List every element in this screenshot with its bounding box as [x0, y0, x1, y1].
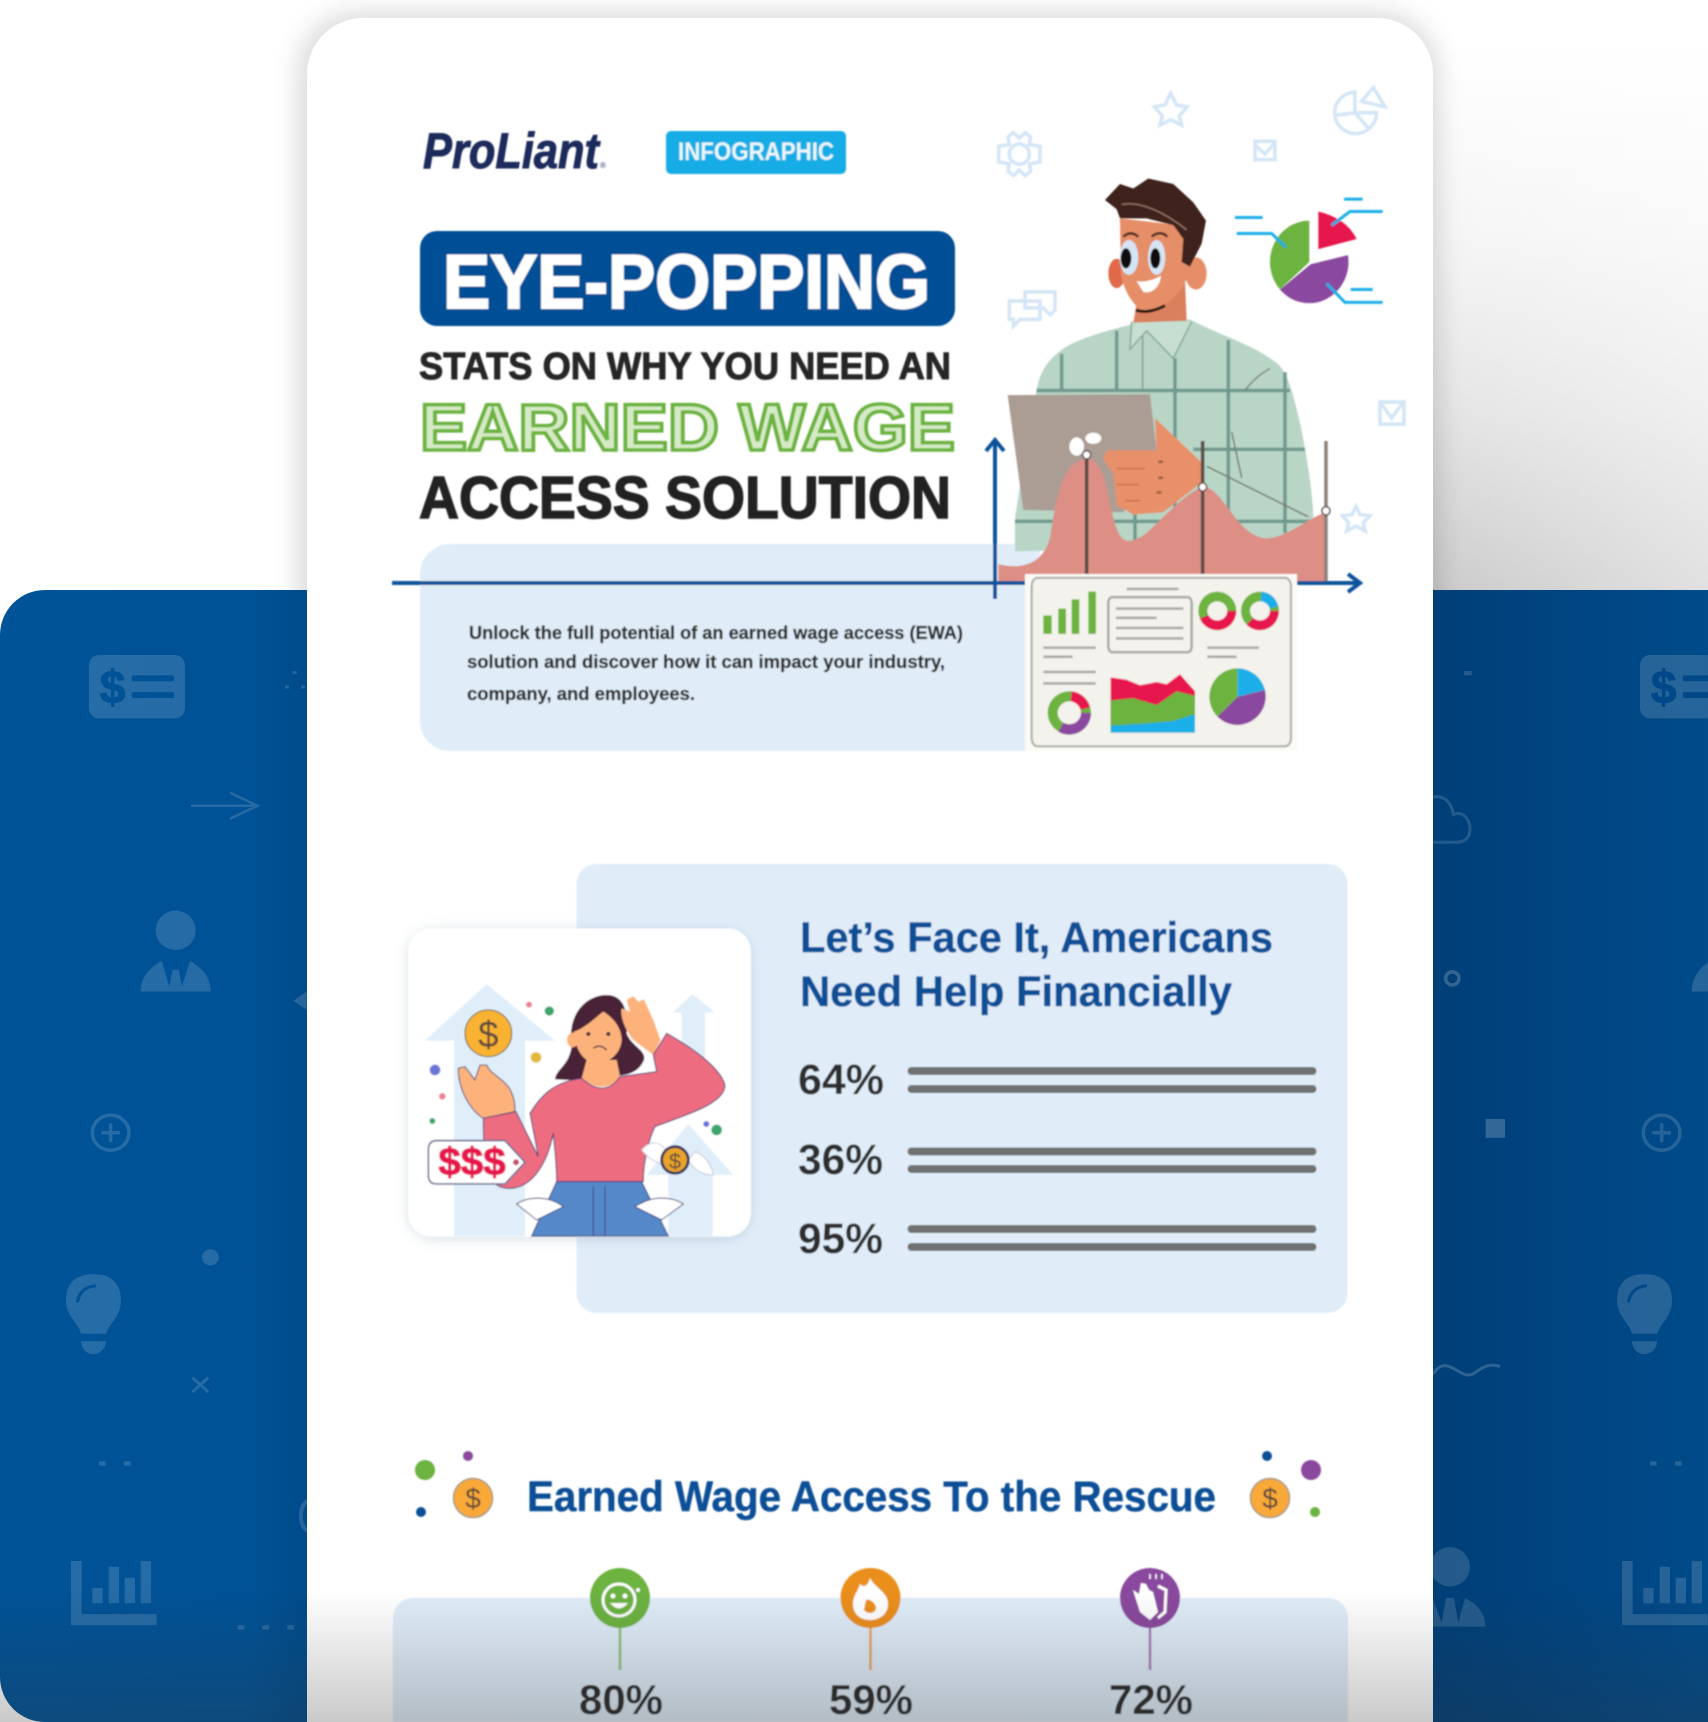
background icons: beside card on right: [1430, 671, 1505, 1627]
icon: checkbox: [1380, 402, 1404, 424]
area chart: [998, 459, 1326, 581]
panel: rescue stats: [393, 1598, 1348, 1722]
woman: [458, 995, 725, 1236]
heading: financial help: Let’s Face It, Americans: [800, 914, 1273, 962]
dashboard text lines: [1043, 589, 1259, 683]
icon: star small: [1343, 506, 1370, 531]
title line: stats: STATS ON WHY YOU NEED AN: [419, 346, 951, 388]
main white card: [307, 18, 1433, 1722]
chart posts: [1069, 433, 1330, 581]
dashboard bars: [1043, 592, 1096, 634]
panel: financial help: [576, 864, 1348, 1313]
title line: earned wage: EARNED WAGE: [420, 390, 955, 464]
chart axes: [392, 440, 1360, 599]
icon: star: [1154, 93, 1187, 125]
title line: access solution: ACCESS SOLUTION: [419, 465, 951, 531]
icon: gear: [999, 133, 1040, 176]
intro text: company, and employees.: [467, 683, 695, 704]
logo: ProLiant: ProLiant: [423, 123, 601, 179]
panel: intro background: [420, 544, 1040, 751]
price tag: [428, 1140, 525, 1184]
badge: INFOGRAPHIC: INFOGRAPHIC: [678, 138, 834, 166]
background: upper right shadow: [1433, 0, 1708, 590]
stat: 72% with clapping hands icon: [1109, 1568, 1193, 1722]
stat: 80% with smile icon: 80%: [579, 1676, 663, 1722]
blue background band: [0, 590, 1708, 1722]
confetti dots: [429, 1002, 722, 1135]
badge: INFOGRAPHIC: [666, 131, 846, 174]
tablet: [1008, 394, 1160, 512]
dashboard area chart: [1111, 674, 1195, 733]
dashboard pie: [1209, 668, 1266, 725]
illustration card: worried woman: [408, 928, 751, 1237]
coin: [465, 1010, 512, 1057]
illustration: man with tablet: [998, 178, 1330, 581]
background icons: right column: [1617, 655, 1708, 1625]
decoration: right coin and dots: [1250, 1451, 1321, 1518]
stat row: 36%: [798, 1136, 1316, 1184]
dashboard donuts: [1048, 592, 1279, 735]
stat: 80% with smile icon: [579, 1568, 663, 1722]
background icons: left column: [66, 655, 316, 1629]
stat: 59% with flame icon: 59%: [829, 1676, 913, 1722]
intro text: solution and discover how it can impact your industry,: [467, 651, 945, 672]
shirt: [1015, 319, 1313, 551]
bottom fade overlay: [0, 1590, 1708, 1722]
decorative icons around the man: [999, 88, 1404, 531]
title box: EYE-POPPING: EYE-POPPING: [443, 240, 930, 325]
heading: financial help: Need Help Financially: [800, 968, 1232, 1016]
stat: 59% with flame icon: [829, 1568, 913, 1722]
winged coin: [642, 1143, 713, 1175]
heading: earned wage access to the rescue: Earned Wage Access To the Rescue: [527, 1473, 1216, 1521]
winged coin: $: [669, 1148, 681, 1173]
intro text: [467, 622, 963, 704]
card shadow: [300, 14, 1436, 640]
neck and head: [1105, 178, 1207, 323]
illustration card shadow: [408, 930, 751, 1239]
background arrows: [425, 984, 733, 1236]
stat row: 64%: 64%: [798, 1056, 884, 1104]
intro text: Unlock the full potential of an earned wage access (EWA): [469, 622, 963, 643]
stat row: 64%: [798, 1056, 1316, 1104]
face details: [586, 1032, 610, 1050]
logo: ProLiant: ®: [600, 161, 606, 170]
decoration: left coin and dots: [415, 1451, 492, 1518]
illustration: pie chart with leaders: [1235, 199, 1383, 303]
stat row: 36%: 36%: [798, 1136, 883, 1184]
coin: $: [478, 1014, 499, 1055]
icon: chat bubbles: [1009, 292, 1055, 326]
background icon: money card dollar, right: $: [1651, 661, 1676, 713]
icon: mail: [1255, 141, 1275, 160]
price tag: $$$: [438, 1140, 506, 1184]
icon: pie: [1335, 88, 1385, 133]
illustration: dashboard card: [1025, 574, 1297, 751]
stat row: 95%: 95%: [798, 1215, 883, 1263]
heading: financial help: [800, 914, 1273, 1016]
stat row: 95%: [798, 1215, 1316, 1263]
decoration: right coin and dots: $: [1262, 1483, 1278, 1514]
stat: 72% with clapping hands icon: 72%: [1109, 1676, 1193, 1722]
decoration: left coin and dots: $: [465, 1483, 481, 1514]
hand: [1103, 418, 1203, 515]
background icon: money card dollar, left: $: [100, 661, 125, 713]
